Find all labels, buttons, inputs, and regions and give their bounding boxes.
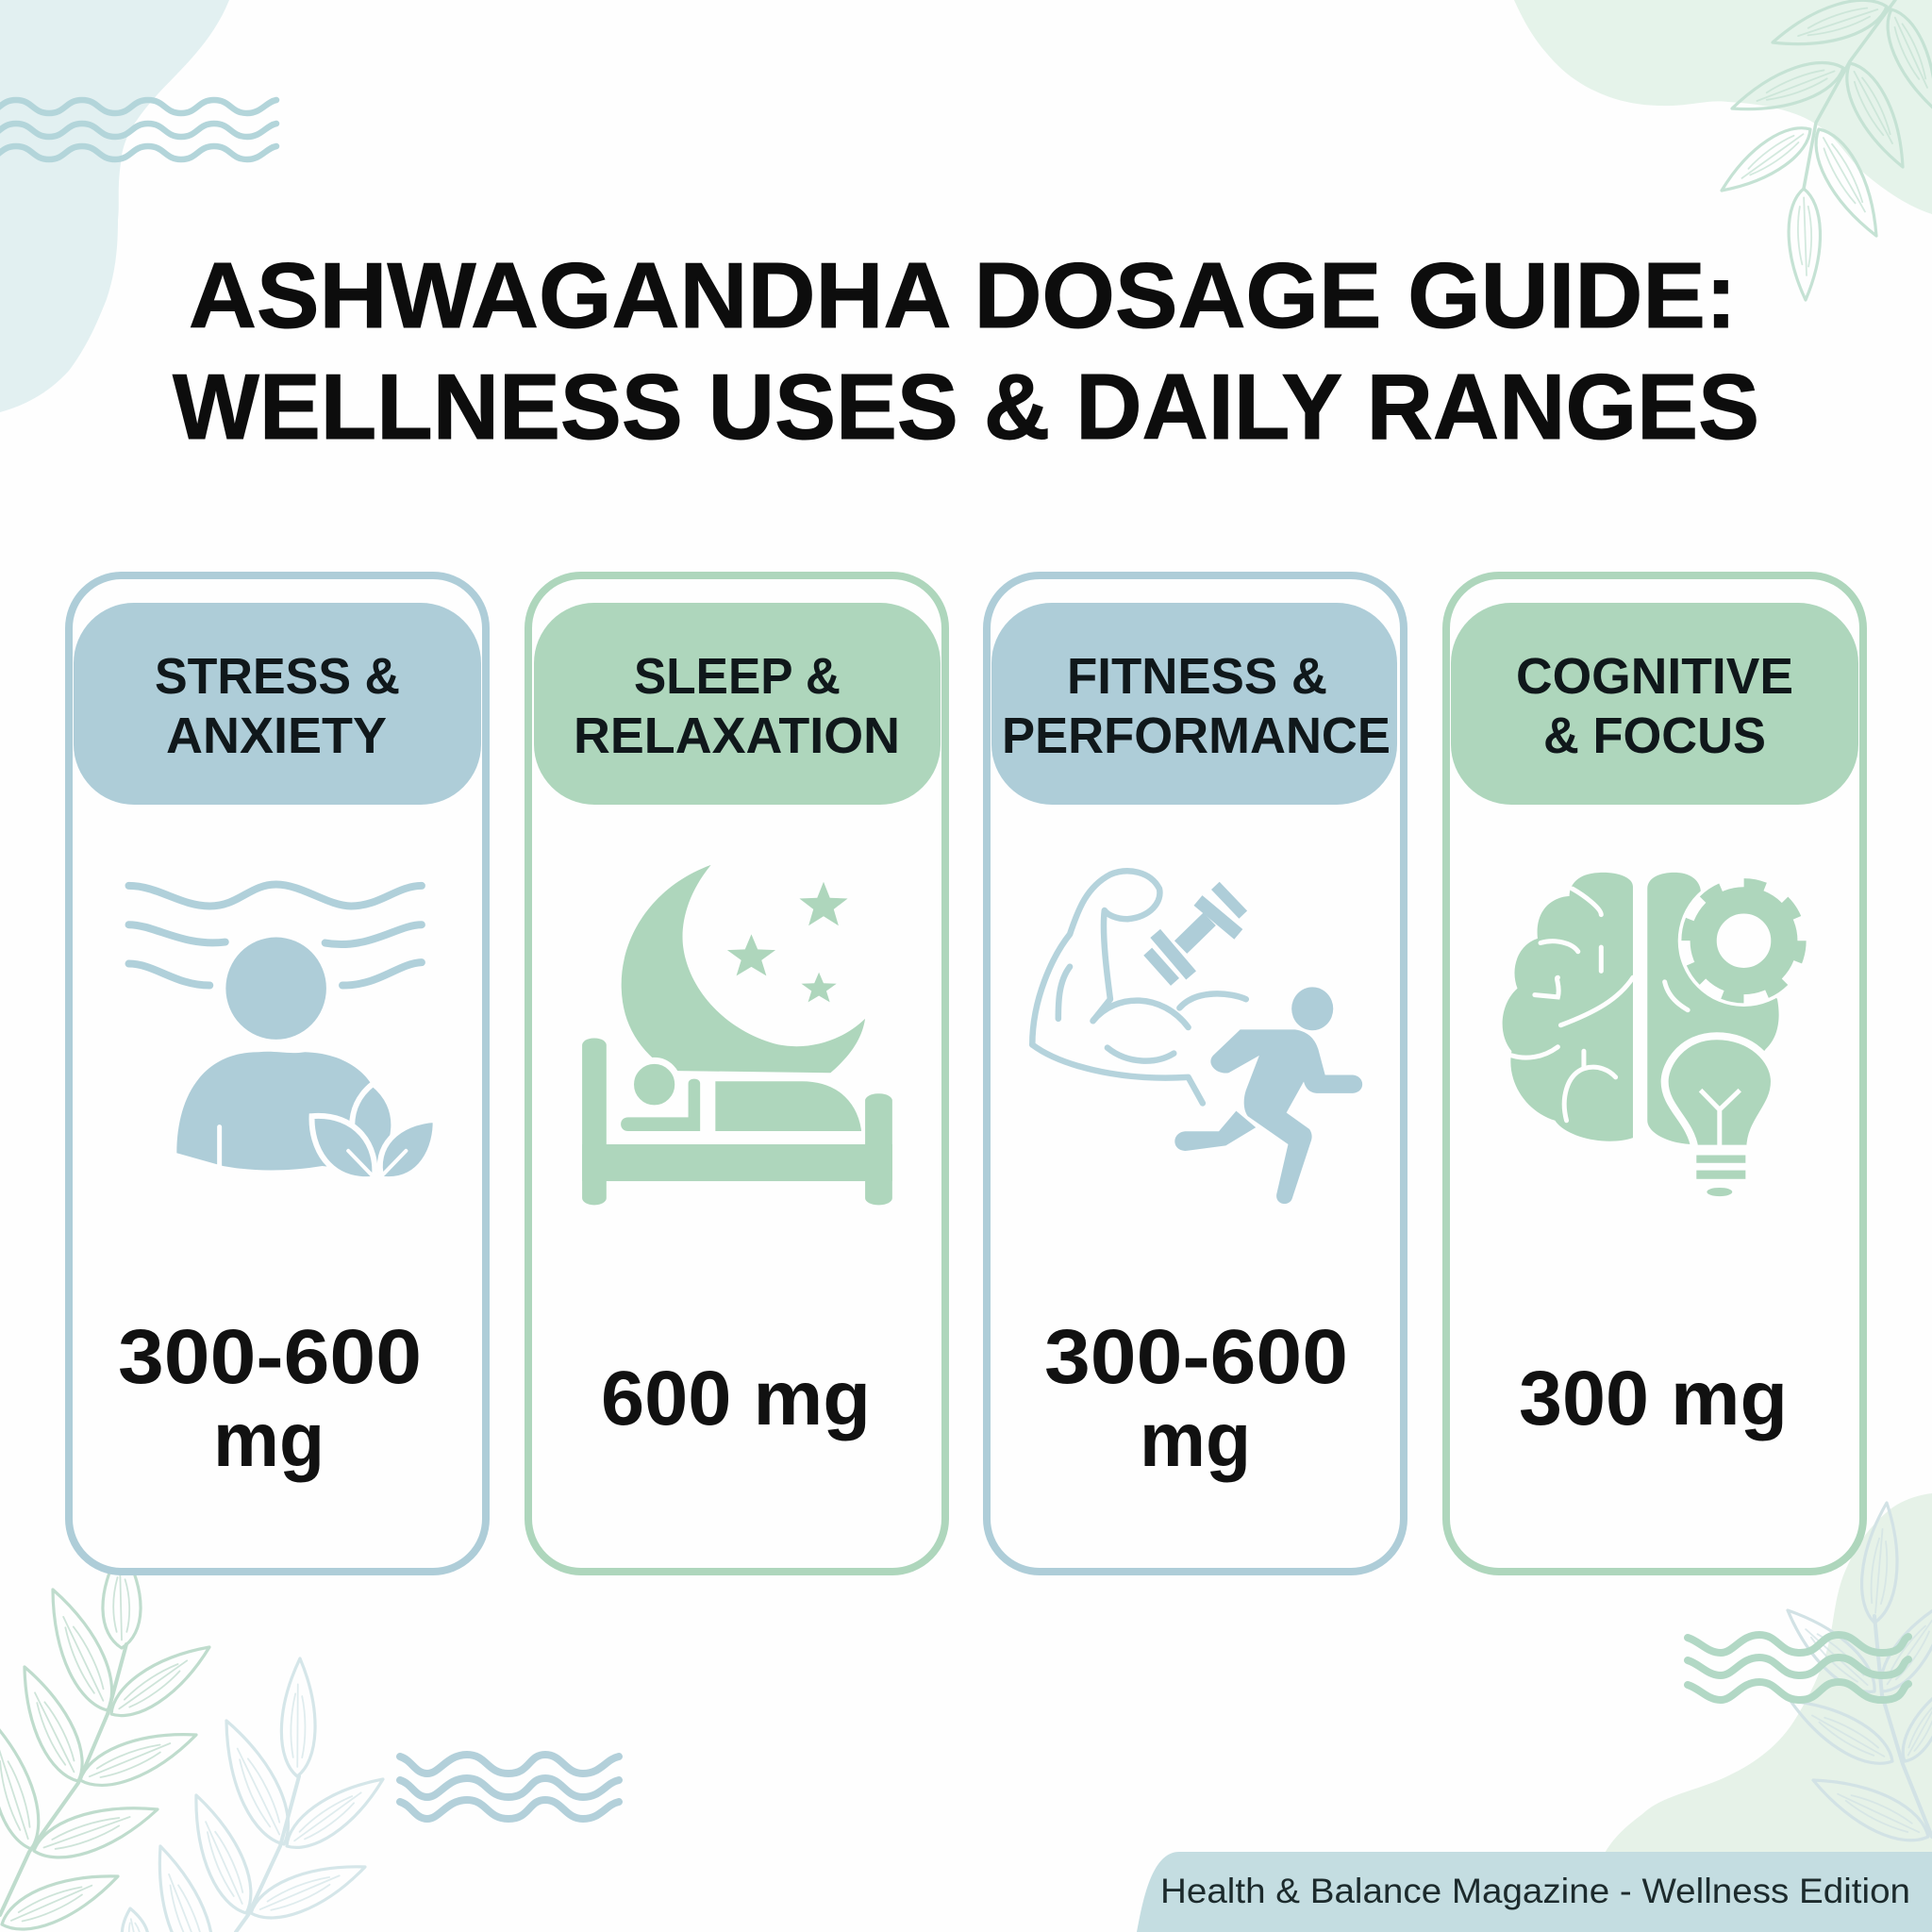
- heading pill: sleep and relaxation: RELAXATION: [574, 708, 900, 764]
- background blob: top right: [1514, 0, 1932, 214]
- heading pill: stress and anxiety: [74, 603, 481, 805]
- dosage: 300-600 mg: [1044, 1314, 1348, 1483]
- decoration: bottom centre waves: [400, 1755, 619, 1819]
- heading pill: fitness and performance: [991, 603, 1397, 805]
- dosage: 300 mg: 300 mg: [1519, 1356, 1788, 1441]
- heading pill: cognitive and focus: COGNITIVE: [1516, 648, 1793, 705]
- heading pill: sleep and relaxation: SLEEP &: [634, 648, 841, 705]
- dosage: 600 mg: 600 mg: [601, 1356, 871, 1441]
- icon: moon, stars and bed: [582, 865, 892, 1205]
- decoration: bottom left pale leaf branch: [117, 1658, 392, 1932]
- heading pill: cognitive and focus: [1451, 603, 1858, 805]
- dosage: 300-600 mg: mg: [1140, 1397, 1251, 1483]
- background blob: top left: [0, 0, 229, 412]
- background blob: bottom right: [1602, 1493, 1932, 1858]
- heading pill: sleep and relaxation: [534, 603, 941, 805]
- footer banner: Health & Balance Magazine - Wellness Edition: [1160, 1872, 1910, 1910]
- footer banner: [1137, 1852, 1932, 1932]
- icon: flexed arm, dumbbell and runner: [1032, 871, 1362, 1204]
- decoration: bottom left green leaf branch: [0, 1547, 219, 1932]
- dosage: 300-600 mg: mg: [213, 1397, 325, 1483]
- panel: stress and anxiety: [69, 575, 486, 1572]
- panel: sleep and relaxation: [528, 575, 945, 1572]
- dosage: 300-600 mg: 300-600: [118, 1314, 422, 1400]
- decoration: bottom right waves: [1688, 1635, 1908, 1700]
- decoration: top left waves: [0, 100, 276, 159]
- title: WELLNESS USES & DAILY RANGES: [173, 355, 1759, 458]
- panel: cognitive and focus: [1446, 575, 1863, 1572]
- heading pill: fitness and performance: FITNESS &: [1067, 648, 1327, 705]
- heading pill: stress and anxiety: STRESS &: [155, 648, 400, 705]
- heading pill: cognitive and focus: & FOCUS: [1543, 708, 1766, 764]
- panel: fitness and performance: [987, 575, 1404, 1572]
- icon: brain with gear and light bulb: [1503, 873, 1809, 1196]
- title: [173, 243, 1759, 458]
- heading pill: stress and anxiety: ANXIETY: [166, 708, 387, 764]
- heading pill: fitness and performance: PERFORMANCE: [1002, 708, 1391, 764]
- dosage: 300-600 mg: 300-600: [1044, 1314, 1348, 1400]
- decoration: bottom right leaf branch: [1776, 1501, 1932, 1853]
- dosage: 300-600 mg: [118, 1314, 422, 1483]
- title: ASHWAGANDHA DOSAGE GUIDE:: [189, 243, 1737, 347]
- icon: stressed person with leaf: [129, 885, 436, 1179]
- decoration: top right leaf branch: [1713, 0, 1932, 300]
